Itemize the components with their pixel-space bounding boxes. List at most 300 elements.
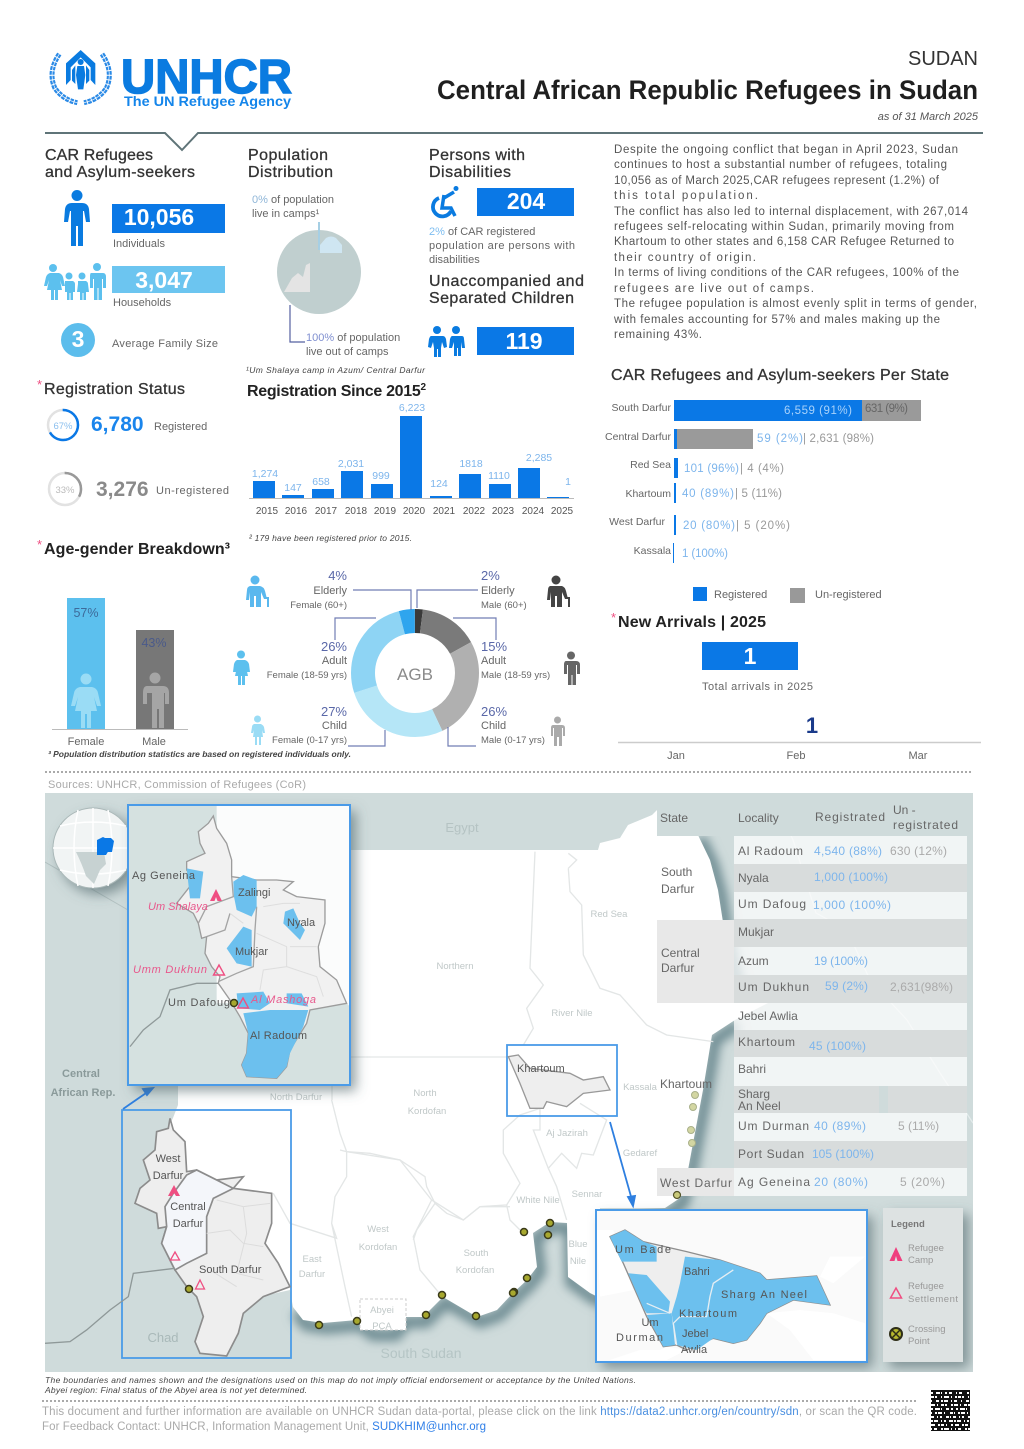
table localities: An Neel xyxy=(738,1099,781,1113)
QR code xyxy=(931,1390,970,1431)
legend: Legend xyxy=(891,1219,925,1230)
map panel xyxy=(45,793,973,1372)
text: disabilities xyxy=(429,254,480,266)
narrative text: refugees self-relocating within Sudan, primarily moving from xyxy=(614,221,954,233)
table localities: Jebel Awlia xyxy=(738,1009,798,1023)
values: 101 (96%) xyxy=(684,463,739,475)
narrative text: Despite the ongoing conflict that began in April 2023, Sudan xyxy=(614,144,958,156)
heading: Separated Children xyxy=(429,290,574,307)
icon: children xyxy=(428,326,465,357)
heading: Persons with xyxy=(429,147,525,164)
state labels: West Darfur xyxy=(609,516,665,528)
table values: 4,540 (88%) xyxy=(814,844,882,858)
table localities: Nyala xyxy=(738,871,769,885)
table localities: Khartoum xyxy=(738,1035,795,1049)
narrative text: remaining 43%. xyxy=(614,329,702,341)
text: country and state labels: South Sudan xyxy=(381,1345,461,1361)
panel: registration status xyxy=(37,377,229,505)
text: country and state labels: Sennar xyxy=(572,1189,602,1200)
Abyei box: PCA xyxy=(372,1321,392,1332)
panel: CAR refugees xyxy=(44,147,225,357)
labels: male xyxy=(481,568,550,746)
Saudi coast lines xyxy=(967,1113,973,1123)
table states: Darfur xyxy=(661,882,694,896)
labels: male: 15% xyxy=(481,639,507,654)
table states: Khartoum xyxy=(660,1077,712,1091)
title: Central African Republic Refugees in Sudan xyxy=(437,75,978,105)
footer: This document and further information are available on UNHCR Sudan data-portal, please click on the link https://data2.unhcr.org/en/country/sdn, or scan the QR code. xyxy=(42,1406,917,1418)
icon: adult female xyxy=(233,650,250,685)
narrative text: Khartoum to other states and 6,158 CAR Refugee Returned to xyxy=(614,236,954,248)
table header: Registrated xyxy=(815,810,885,824)
bar chart: 1,274 xyxy=(252,468,278,480)
icon: male xyxy=(143,672,169,728)
panel: refugees per state xyxy=(605,367,949,603)
inset: Darfur localities: Al Mashoga xyxy=(250,994,316,1006)
inset: small Khartoum xyxy=(507,1045,617,1116)
bar chart: 2019 xyxy=(374,506,397,517)
ring: unregistered xyxy=(49,473,229,505)
labels: male: Elderly xyxy=(481,585,515,597)
text: country and state labels: Kassala xyxy=(623,1082,658,1093)
inset: Khartoum localities xyxy=(596,1210,867,1362)
table states xyxy=(660,865,732,1190)
arrow: to Khartoum inset xyxy=(610,1122,635,1206)
table values: 630 (12%) xyxy=(890,844,947,858)
stat: individuals: Individuals xyxy=(113,238,165,250)
bar chart: 1110 xyxy=(488,470,510,482)
text: of CAR registered xyxy=(445,226,535,238)
narrative text xyxy=(613,144,977,341)
bar chart: 2015 xyxy=(256,506,279,517)
panel: population distribution xyxy=(246,147,426,375)
text: country and state labels: Aj Jazirah xyxy=(546,1128,588,1139)
connector xyxy=(290,305,305,342)
values xyxy=(682,403,908,560)
text: country and state labels: North xyxy=(413,1088,437,1099)
text: country and state labels: Darfur xyxy=(299,1269,325,1280)
inset: Darfur localities: Nyala xyxy=(287,917,316,929)
labels: female: Adult xyxy=(322,655,347,667)
table values: 2,631(98%) xyxy=(890,980,953,994)
panel: new arrivals xyxy=(611,610,981,762)
values: 59 (2%) xyxy=(757,433,803,445)
ring: registered: 6,780 xyxy=(91,413,144,436)
label: in camps: 0% xyxy=(252,194,268,206)
wordmark: UNHCR xyxy=(121,51,292,104)
label: in camps: of population xyxy=(268,194,334,206)
table localities: Port Sudan xyxy=(738,1147,804,1161)
map disclaimer xyxy=(44,1375,636,1395)
bar chart xyxy=(249,402,574,517)
gender bars: 57% xyxy=(73,606,99,620)
state labels: Central Darfur xyxy=(605,431,671,443)
legend: camp: Refugee xyxy=(908,1243,944,1254)
text: country and state labels: African Rep. xyxy=(51,1087,115,1099)
base map xyxy=(45,793,973,1372)
bar chart: 124 xyxy=(430,478,448,490)
legend xyxy=(883,1208,963,1362)
divider xyxy=(45,771,972,773)
icon: child male xyxy=(551,716,565,746)
ring: unregistered: 33% xyxy=(55,485,75,496)
state labels: Khartoum xyxy=(625,488,671,500)
icon: female xyxy=(71,674,101,728)
table values: 45 (100%) xyxy=(809,1039,866,1053)
legend xyxy=(693,587,882,603)
state labels xyxy=(605,402,672,557)
icon: adult male xyxy=(564,652,580,685)
narrative text: The refugee population is almost evenly split in terms of gender, xyxy=(614,298,977,310)
stat: 204 xyxy=(477,188,574,216)
heading: CAR Refugees and Asylum-seekers Per State xyxy=(611,367,949,384)
stat: households: 3,047 xyxy=(135,267,193,293)
state labels: Red Sea xyxy=(630,459,671,471)
labels: male: 26% xyxy=(481,704,507,719)
table: localities xyxy=(657,793,973,1198)
inset: Darfur states overview xyxy=(45,1110,291,1358)
legend: settlement: Refugee xyxy=(908,1281,944,1292)
table header: registrated xyxy=(893,818,958,832)
Abyei box xyxy=(360,1299,406,1332)
heading: Registration Since 2015 xyxy=(247,383,421,400)
panel: persons with disabilities xyxy=(429,147,575,266)
map disclaimer: The boundaries and names shown and the designations used on this map do not imply official endorsement or acceptance by the United Nations. xyxy=(45,1375,636,1385)
labels: male: Male (60+) xyxy=(481,600,527,611)
stat: individuals: 10,056 xyxy=(124,204,194,230)
stat: 1 xyxy=(744,643,757,669)
table header: State xyxy=(660,811,688,825)
table localities: Mukjar xyxy=(738,925,774,939)
bar chart: 2024 xyxy=(522,506,545,517)
legend: Registered xyxy=(714,589,767,601)
table localities: Um Dukhun xyxy=(738,980,809,994)
legend: crossing: Point xyxy=(908,1336,930,1347)
table values: 5 (11%) xyxy=(898,1119,939,1133)
inset: Darfur states overview: Darfur xyxy=(153,1170,184,1182)
state labels: Kassala xyxy=(634,545,671,557)
table localities: Um Durman xyxy=(738,1119,809,1133)
legend: settlement xyxy=(889,1282,958,1302)
table localities: Um Dafoug xyxy=(738,897,806,911)
text: country and state labels: North Darfur xyxy=(270,1092,322,1103)
inset: Khartoum localities: Sharg An Neel xyxy=(721,1289,807,1301)
inset: Darfur localities: Mukjar xyxy=(235,946,268,958)
values: 1 (100%) xyxy=(682,548,728,560)
stat: households xyxy=(112,266,225,309)
connectors xyxy=(335,590,496,746)
panel: registration since 2015 xyxy=(247,382,574,543)
labels: male: Child xyxy=(481,720,506,732)
faded crossing points xyxy=(688,1092,698,1146)
donut chart xyxy=(363,621,467,725)
pie xyxy=(277,222,361,314)
inset: Khartoum localities: Khartoum xyxy=(679,1308,737,1320)
gender bars: Female xyxy=(68,736,104,748)
icon: child female xyxy=(251,716,265,745)
values: | 2,631 (98%) xyxy=(803,433,874,445)
bar chart: 2022 xyxy=(463,506,486,517)
text: country and state labels: Nile xyxy=(570,1256,586,1267)
inset: Khartoum localities: Durman xyxy=(616,1332,663,1344)
inset: Khartoum localities: Awlia xyxy=(681,1344,708,1356)
stat: 204: 204 xyxy=(507,188,545,214)
bar chart: 2,031 xyxy=(338,458,364,470)
heading: CAR Refugees xyxy=(45,147,153,164)
inset: Darfur localities xyxy=(128,805,350,1085)
table values: 1,000 (100%) xyxy=(814,870,888,884)
state boundaries xyxy=(273,852,713,1317)
labels: Ag Geneina xyxy=(132,870,196,882)
text: country and state labels: River Nile xyxy=(551,1008,593,1019)
icon: person xyxy=(64,190,90,246)
stat xyxy=(702,642,798,670)
narrative text: In terms of living conditions of the CAR refugees, 100% of the xyxy=(614,267,959,279)
footnote: ³ Population distribution statistics are based on registered individuals only. xyxy=(48,749,351,759)
arrow: to Darfur localities xyxy=(123,1088,153,1109)
table header: Un - xyxy=(893,803,916,817)
stat: 119 xyxy=(477,327,574,355)
labels: male: Male (0-17 yrs) xyxy=(481,735,545,746)
table localities xyxy=(738,844,810,1189)
inset: Khartoum localities: Um Bade xyxy=(615,1244,671,1256)
table localities: Ag Geneina xyxy=(738,1175,810,1189)
inset: Darfur states overview: Central xyxy=(170,1201,206,1213)
legend: settlement: Settlement xyxy=(908,1294,958,1305)
table states: South xyxy=(661,865,692,879)
legend: crossing: Crossing xyxy=(908,1324,946,1335)
stat: individuals xyxy=(112,204,225,250)
table states: Darfur xyxy=(661,961,694,975)
panel: age-gender breakdown xyxy=(37,537,580,759)
bar chart: 2025 xyxy=(551,506,574,517)
labels: male: Male (18-59 yrs) xyxy=(481,670,550,681)
date: as of 31 March 2025 xyxy=(878,111,979,123)
labels: female: 4% xyxy=(328,568,347,583)
table header: Locality xyxy=(738,811,779,825)
icon: UNHCR emblem xyxy=(52,50,109,103)
footnote: ¹Um Shalaya camp in Azum/ Central Darfur xyxy=(246,365,426,375)
narrative text: this total population. xyxy=(614,190,758,202)
footnote: ² 179 have been registered prior to 2015. xyxy=(249,533,412,543)
narrative text: The conflict has also led to internal displacement, with 267,014 xyxy=(614,206,969,218)
table values: 40 (89%) xyxy=(814,1119,866,1133)
text: country and state labels: Central xyxy=(62,1068,100,1080)
globe xyxy=(45,808,133,910)
inset: Khartoum localities: Bahri xyxy=(684,1266,710,1278)
bar chart: 2023 xyxy=(492,506,515,517)
text: country and state labels xyxy=(51,820,658,1361)
stat: average family size xyxy=(61,323,218,357)
table localities: Al Radoum xyxy=(738,844,803,858)
labels: female: Female (60+) xyxy=(290,600,347,611)
coast shadow xyxy=(296,838,748,1335)
text: country and state labels: Egypt xyxy=(445,820,479,835)
inset: Darfur localities: Umm Dukhun xyxy=(133,964,207,976)
heading: New Arrivals | 2025 xyxy=(618,614,766,631)
divider xyxy=(42,1400,918,1402)
ring: unregistered: Un-registered xyxy=(156,485,229,497)
title block xyxy=(437,48,979,123)
values: 20 (80%) xyxy=(683,520,735,532)
caption: Total arrivals in 2025 xyxy=(702,681,813,693)
ring: registered: 67% xyxy=(53,421,73,432)
heading: * xyxy=(37,377,42,392)
gender bars: 43% xyxy=(141,636,167,650)
table values: 59 (2%) xyxy=(825,979,868,993)
stat: average family size: Average Family Size xyxy=(112,338,218,350)
label: out of camps: 100% xyxy=(306,332,334,344)
gender bars: Male xyxy=(142,736,166,748)
bar chart: 6,223 xyxy=(399,402,425,414)
text: country and state labels: Gedaref xyxy=(623,1148,658,1159)
text: country and state labels: Red Sea xyxy=(591,909,628,920)
table values: 20 (80%) xyxy=(814,1175,868,1189)
inset: Darfur states overview: Chad xyxy=(147,1330,179,1345)
logo: UNHCR xyxy=(52,50,292,109)
bars xyxy=(673,400,921,563)
footer xyxy=(42,1406,917,1433)
text: country and state labels: Kordofan xyxy=(359,1242,397,1253)
bar chart: 2017 xyxy=(315,506,338,517)
monthly chart xyxy=(618,713,981,762)
crossing points xyxy=(316,1220,554,1328)
monthly chart: Feb xyxy=(787,750,805,762)
table values: 1,000 (100%) xyxy=(813,898,891,912)
inset: Darfur localities: Al Radoum xyxy=(250,1030,307,1042)
heading: 2 xyxy=(420,382,426,393)
bar chart: 1818 xyxy=(459,458,483,470)
bar chart: 2021 xyxy=(433,506,456,517)
sources: Sources: UNHCR, Commission of Refugees (CoR) xyxy=(48,779,306,791)
labels: female: Female (0-17 yrs) xyxy=(272,735,347,746)
gender bars xyxy=(52,598,188,748)
table values xyxy=(809,844,953,1189)
text: country and state labels: White Nile xyxy=(516,1195,560,1206)
heading: Age-gender Breakdown³ xyxy=(44,541,230,558)
monthly chart: Mar xyxy=(909,750,928,762)
narrative text: with females accounting for 57% and males making up the xyxy=(613,314,940,326)
icon: family xyxy=(44,263,106,300)
bar chart: 147 xyxy=(284,482,302,494)
labels: female: 26% xyxy=(321,639,347,654)
table localities: Sharg xyxy=(738,1087,770,1101)
values: 6,559 (91%) xyxy=(784,405,852,417)
table values: 19 (100%) xyxy=(814,954,868,968)
text: population are persons with xyxy=(429,240,575,252)
heading: Unaccompanied and xyxy=(429,273,584,290)
inset: Darfur localities: Um Shalaya xyxy=(148,901,208,913)
text: country and state labels: East xyxy=(302,1254,322,1265)
table values: 5 (20%) xyxy=(900,1175,945,1189)
labels: female xyxy=(267,568,347,746)
stat: households: Households xyxy=(113,297,172,309)
country: SUDAN xyxy=(908,48,978,70)
inset: Darfur states overview: Darfur xyxy=(173,1218,204,1230)
stat: 119: 119 xyxy=(505,328,543,354)
legend: camp: Camp xyxy=(908,1255,933,1266)
label: out of camps: of population xyxy=(334,332,400,344)
bar chart: 999 xyxy=(372,470,390,482)
legend: Un-registered xyxy=(815,589,882,601)
heading: Disabilities xyxy=(429,164,511,181)
icon: elderly female xyxy=(246,576,269,607)
inset: Khartoum localities: Jebel xyxy=(682,1328,708,1340)
narrative text: 10,056 as of March 2025,CAR refugees represent (1.2%) of xyxy=(614,175,940,187)
donut label: AGB xyxy=(397,665,433,684)
heading: and Asylum-seekers xyxy=(45,164,195,181)
bar chart: 2020 xyxy=(403,506,426,517)
text: country and state labels: West xyxy=(367,1224,389,1235)
table values: 105 (100%) xyxy=(812,1147,874,1161)
bar chart: 1 xyxy=(565,476,571,488)
Abyei box: Abyei xyxy=(370,1305,394,1316)
ring: registered: Registered xyxy=(154,421,207,433)
panel: unaccompanied children xyxy=(428,273,584,357)
heading: Distribution xyxy=(248,164,333,181)
table header xyxy=(660,806,958,832)
inset: Darfur states overview: West xyxy=(156,1153,180,1165)
legend: camp xyxy=(890,1244,944,1265)
narrative text: their country of origin. xyxy=(614,252,756,264)
labels: female: Child xyxy=(322,720,347,732)
state labels: South Darfur xyxy=(611,402,672,414)
Sudan land xyxy=(172,810,768,1323)
heading: Population xyxy=(248,147,328,164)
text: country and state labels: Kordofan xyxy=(456,1265,494,1276)
table states: Central xyxy=(661,946,700,960)
ring: unregistered: 3,276 xyxy=(96,478,149,501)
heading: Registration Status xyxy=(44,381,185,398)
text: 2% xyxy=(429,226,445,238)
bar chart: 2,285 xyxy=(526,452,552,464)
values: 40 (89%) xyxy=(682,488,734,500)
inset: Khartoum localities: Um xyxy=(641,1317,659,1329)
values: | 4 (4%) xyxy=(740,463,784,475)
icon: wheelchair xyxy=(433,186,458,216)
table states: West Darfur xyxy=(660,1176,732,1190)
inset: Darfur states overview: South Darfur xyxy=(199,1264,262,1276)
labels: female: 27% xyxy=(321,704,347,719)
inset: small Khartoum: Khartoum xyxy=(517,1063,565,1075)
text: country and state labels: Blue xyxy=(568,1239,588,1250)
label: out of camps: live out of camps xyxy=(306,346,389,358)
narrative text: continues to host a substantial number of refugees, totaling xyxy=(614,159,947,171)
text: country and state labels: Northern xyxy=(437,961,473,972)
footer: For Feedback Contact: UNHCR, Information Management Unit, SUDKHIM@unhcr.org xyxy=(42,1421,486,1433)
text: country and state labels: South xyxy=(464,1248,488,1259)
table localities: Bahri xyxy=(738,1062,766,1076)
values: | 5 (11%) xyxy=(735,488,782,500)
inset: Darfur localities: Zalingi xyxy=(238,887,270,899)
monthly chart: Jan xyxy=(667,750,685,762)
bar chart: 658 xyxy=(312,476,330,488)
crossing point: West Darfur cell xyxy=(674,1192,680,1198)
labels: male: 2% xyxy=(481,568,500,583)
bar chart: 2016 xyxy=(285,506,308,517)
icon: elderly male xyxy=(547,576,570,607)
map disclaimer: Abyei region: Final status of the Abyei area is not yet determined. xyxy=(44,1385,307,1395)
table localities: Azum xyxy=(738,954,769,968)
bar chart: 2018 xyxy=(345,506,368,517)
ring: registered xyxy=(48,410,207,440)
label: in camps: live in camps¹ xyxy=(252,208,320,220)
markers xyxy=(210,889,222,901)
labels: female: Elderly xyxy=(313,585,347,597)
values: 631 (9%) xyxy=(865,403,908,415)
inset: Darfur localities: Um Dafoug xyxy=(168,997,230,1009)
values: | 5 (20%) xyxy=(736,520,790,532)
